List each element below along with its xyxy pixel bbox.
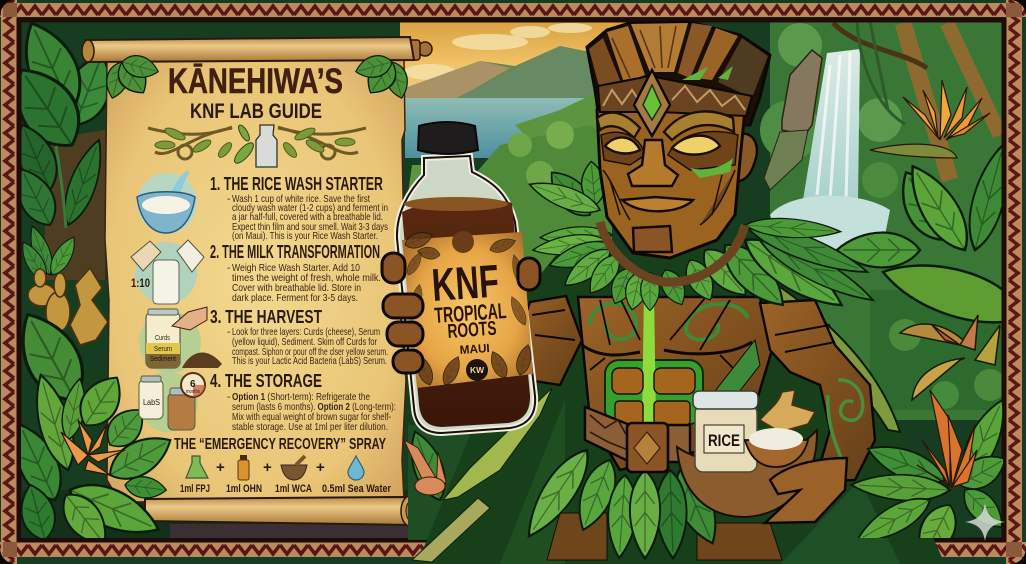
step 3: body text: Look for three layers: Curds (cheese), Serum: [232, 326, 380, 338]
headband: [598, 76, 752, 116]
top roller: [82, 37, 432, 62]
sky: [400, 20, 670, 110]
glowing eyes: [605, 136, 720, 155]
green hills: [405, 85, 612, 290]
icon: flask: [186, 456, 208, 478]
lower foliage under scroll: [21, 490, 421, 538]
glowing abs: [605, 290, 703, 425]
tiki ear: [736, 134, 757, 182]
trees and vines: [833, 22, 1000, 180]
forehead diamond: [634, 70, 670, 136]
left flower: [61, 420, 125, 475]
chest swirls: [582, 298, 760, 410]
step 2: body text: Cover with breathable lid. Store in: [232, 282, 361, 294]
step 4: storage icon: LabS: [143, 398, 160, 407]
scroll paper: [105, 60, 406, 502]
label text: TROPICAL: [434, 298, 507, 328]
title: KĀNEHIWA’S: [168, 62, 343, 101]
sea: [405, 98, 605, 158]
spray recipe row: 0.5ml Sea Water: [322, 483, 392, 495]
parchment scroll: [3, 37, 432, 554]
eye sockets and cheeks: [601, 132, 738, 225]
ornament: vines, bacteria and milk can: [148, 123, 366, 167]
rice jar: [693, 391, 758, 472]
foreground right plant: [850, 390, 1003, 538]
spray recipe row: +: [316, 459, 325, 476]
step 2: body text: times the weight of fresh, whole milk.: [232, 272, 381, 284]
step 3: harvest icon: Curds: [155, 335, 170, 342]
step 4: heading: 4. THE STORAGE: [210, 371, 322, 391]
basket arm: [760, 300, 875, 482]
step 4: storage icon: [138, 372, 205, 432]
step 4: body text: Mix with equal weight of brown sugar for shelf-: [232, 411, 391, 423]
mouth: [622, 197, 693, 211]
KNF bottle: [382, 122, 540, 433]
left jungle leaves: [0, 13, 121, 284]
icon: mortar and pestle: [281, 456, 307, 480]
leaf collar: [526, 160, 878, 319]
bottle label: [402, 232, 533, 388]
step 2: milk icon: [131, 240, 204, 304]
icon: amber bottle: [238, 455, 249, 480]
foreground lower-left plant: [21, 312, 172, 538]
twisted rope collar: [600, 222, 745, 282]
hand holding basket: [765, 458, 847, 523]
step 4: body text: Option 1 (Short-term): Refrigerate the: [232, 391, 370, 403]
mountains: [405, 46, 610, 100]
bottom roller: [145, 496, 419, 526]
step 1: heading: 1. THE RICE WASH STARTER: [210, 174, 383, 194]
right lower flower: [917, 390, 977, 487]
step 1: body text: Wash 1 cup of white rice. Save the first: [232, 193, 370, 205]
spray recipe row: 1ml OHN: [226, 483, 262, 495]
step 3: body text: compast. Siphon or pour off the clser yellow serum.: [232, 346, 388, 358]
liquid surface: [404, 197, 508, 211]
step 3: harvest icon: Sediment: [150, 356, 176, 363]
step 4: body text: -: [227, 391, 231, 403]
step 4: body text: serum (lasts 6 months). Option 2 (Long-term):: [232, 401, 396, 413]
rice jar: RICE: [708, 431, 740, 450]
tiki face: [597, 110, 745, 258]
spray heading: THE “EMERGENCY RECOVERY” SPRAY: [174, 436, 386, 453]
grass skirt: [516, 442, 727, 559]
spray recipe row: +: [263, 459, 272, 476]
step 3: body text: (yellow liquid), Sediment. Skim off Curds for: [232, 336, 377, 348]
step 3: body text: -: [227, 326, 231, 338]
step 3: harvest icon: [139, 307, 222, 373]
step 1: body text: Expect thin film and sour smell. Wait 3-3 days: [232, 221, 388, 233]
chin emblem: [633, 226, 672, 252]
tiki guardian figure: [412, 22, 945, 564]
right jungle background plants: [837, 141, 1018, 409]
label ornament: [403, 228, 534, 388]
label text: MAUI: [459, 341, 490, 357]
step 4: storage icon: 6: [190, 379, 196, 390]
label text: KNF: [430, 254, 501, 311]
step 4: storage icon: months: [186, 389, 200, 395]
step 2: body text: dark place. Ferment for 3-5 days.: [232, 292, 358, 304]
step 1: body text: cloudy wash water (1-2 cups) and ferment in: [232, 202, 388, 214]
corner leaves: [102, 52, 412, 101]
label text: ROOTS: [447, 318, 497, 343]
cheek glow: [690, 158, 733, 178]
step 2: body text: [227, 262, 381, 304]
spray recipe row: 1ml FPJ: [180, 483, 210, 495]
step 3: body text: This is your Lactic Acid Bacteria (LabS) Serum.: [232, 355, 387, 367]
step 2: heading: 2. THE MILK TRANSFORMATION: [210, 242, 380, 262]
subtitle: KNF LAB GUIDE: [190, 100, 322, 123]
ginger root plant: [28, 268, 108, 345]
step 1: body text: -: [227, 193, 231, 205]
icon: water drop: [348, 456, 364, 480]
label badge: [466, 359, 488, 381]
label text: [430, 254, 507, 357]
step 2: milk icon: 1:10: [131, 276, 150, 290]
ginger: [760, 390, 815, 432]
clouds: [404, 23, 592, 80]
belt and buckle: [585, 407, 690, 472]
bottle glass: [397, 156, 535, 433]
bottle cap: [418, 122, 478, 154]
rice bowl: [745, 428, 808, 467]
step 1: rice wash icon: [137, 171, 197, 233]
step 4: body text: stable storage. Use at 1ml per liter dilution.: [232, 421, 388, 433]
woven basket: [677, 430, 817, 517]
green cape: [412, 250, 945, 564]
bottle liquid: [402, 199, 530, 427]
spray recipe row: 1ml WCA: [275, 483, 312, 495]
step 3: harvest icon: Serum: [154, 346, 172, 353]
step 3: heading: 3. THE HARVEST: [210, 307, 322, 327]
arm holding bottle: [510, 296, 582, 385]
step 1: body text: a jar half-full, covered with a breathable lid.: [232, 211, 383, 223]
step 1: body text: [227, 193, 388, 242]
step 2: body text: -: [227, 262, 231, 274]
fingers: [382, 253, 540, 373]
sparkle mark: [965, 503, 1005, 541]
spray recipe row: [180, 455, 392, 495]
brow: [597, 111, 734, 140]
lower middle foliage and flower: [402, 425, 528, 540]
label badge: KW: [470, 366, 484, 375]
spray recipe row: +: [216, 459, 225, 476]
head crown: [587, 22, 770, 125]
legs: [547, 513, 782, 560]
step 2: body text: Weigh Rice Wash Starter. Add 10: [232, 262, 360, 274]
bird of paradise flower: [870, 80, 990, 158]
torso: [578, 297, 772, 470]
waterfall and cliffs: [760, 23, 902, 260]
nose: [628, 140, 678, 186]
step 4: body text: [227, 391, 396, 433]
step 3: body text: [227, 326, 388, 367]
step 1: body text: (on Maui). This is your Rice Wash Starter.: [232, 230, 378, 242]
arm swirl: [828, 380, 863, 470]
